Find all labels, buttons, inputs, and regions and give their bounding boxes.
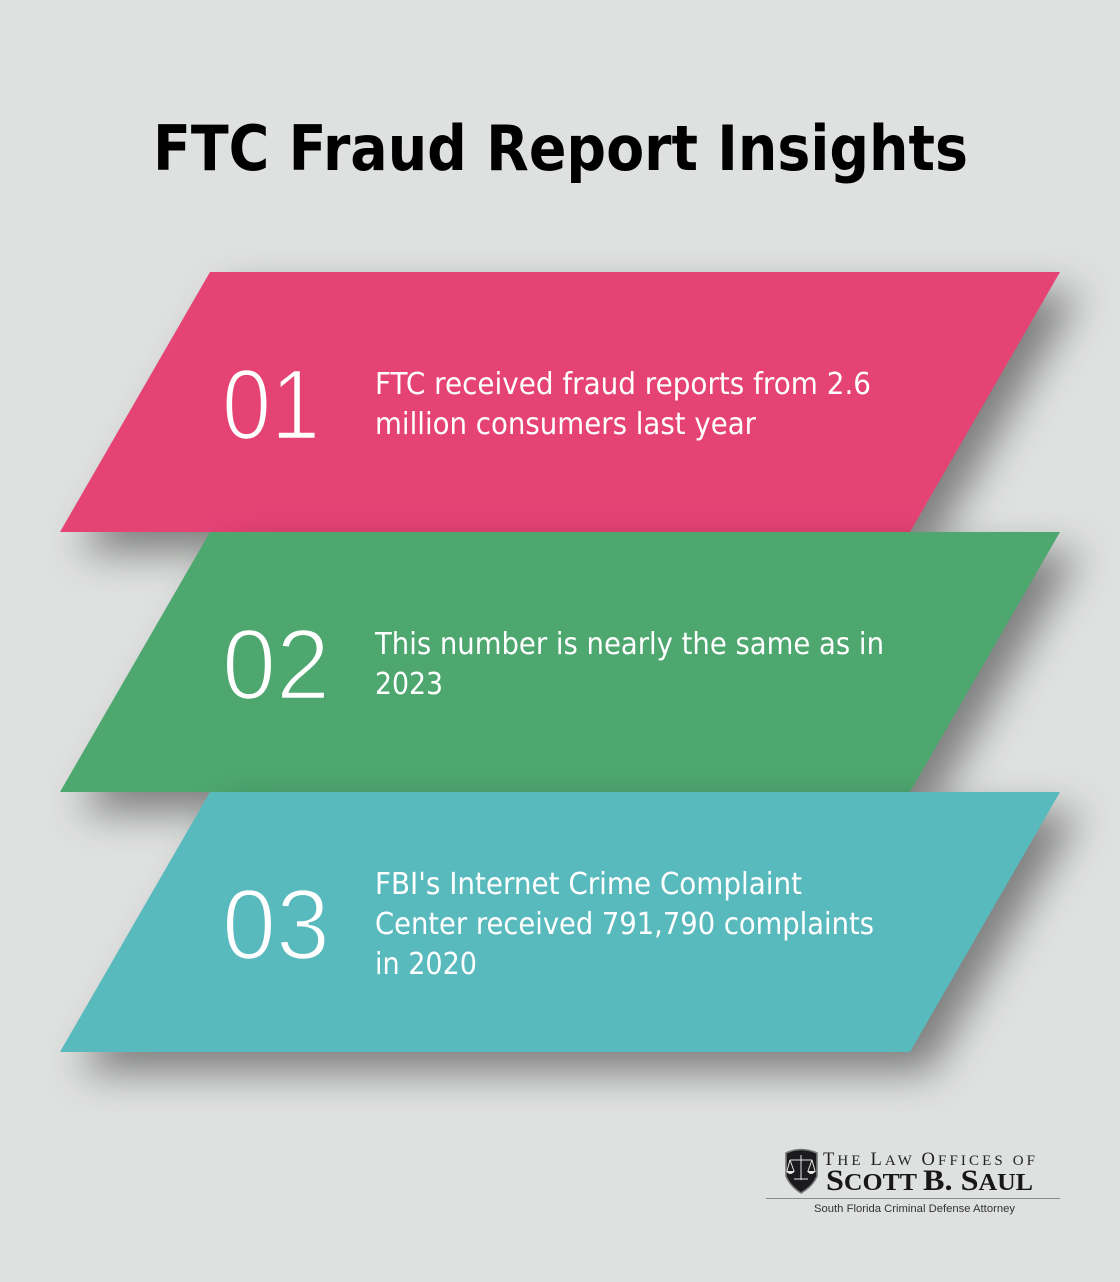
logo: The Law Offices of Scott B. Saul [766,1150,1060,1215]
text: panel 02: This number is nearly the same as in [374,627,884,662]
text: panel 01: million consumers last year [375,407,757,442]
panel: 01 fraud reports [60,272,1080,552]
panel: 02 same as 2023 [60,532,1080,812]
text: panel 01: FTC received fraud reports from 2.6 [375,367,871,402]
text: panel 02 [374,627,884,702]
text: panel 03: FBI's Internet Crime Complaint [375,867,802,902]
logo line 2: SCOTT B. SAUL [826,1164,1033,1197]
text: panel 02: 2023 [375,667,443,702]
logo line 1: THE LAW OFFICES OF [823,1150,1035,1170]
text: panel 03: in 2020 [375,947,477,982]
text: panel 01 [375,367,871,442]
logo tagline: South Florida Criminal Defense Attorney [814,1203,1016,1215]
number 03: 03 [222,869,330,981]
text: panel 03 [375,867,874,982]
number 01: 01 [222,349,320,461]
title: FTC Fraud Report Insights [153,112,968,185]
number 02: 02 [222,609,330,721]
text: panel 03: Center received 791,790 complaints [375,907,874,942]
panel: 03 FBI complaints [60,792,1080,1072]
icon: shield with scales [786,1150,817,1193]
